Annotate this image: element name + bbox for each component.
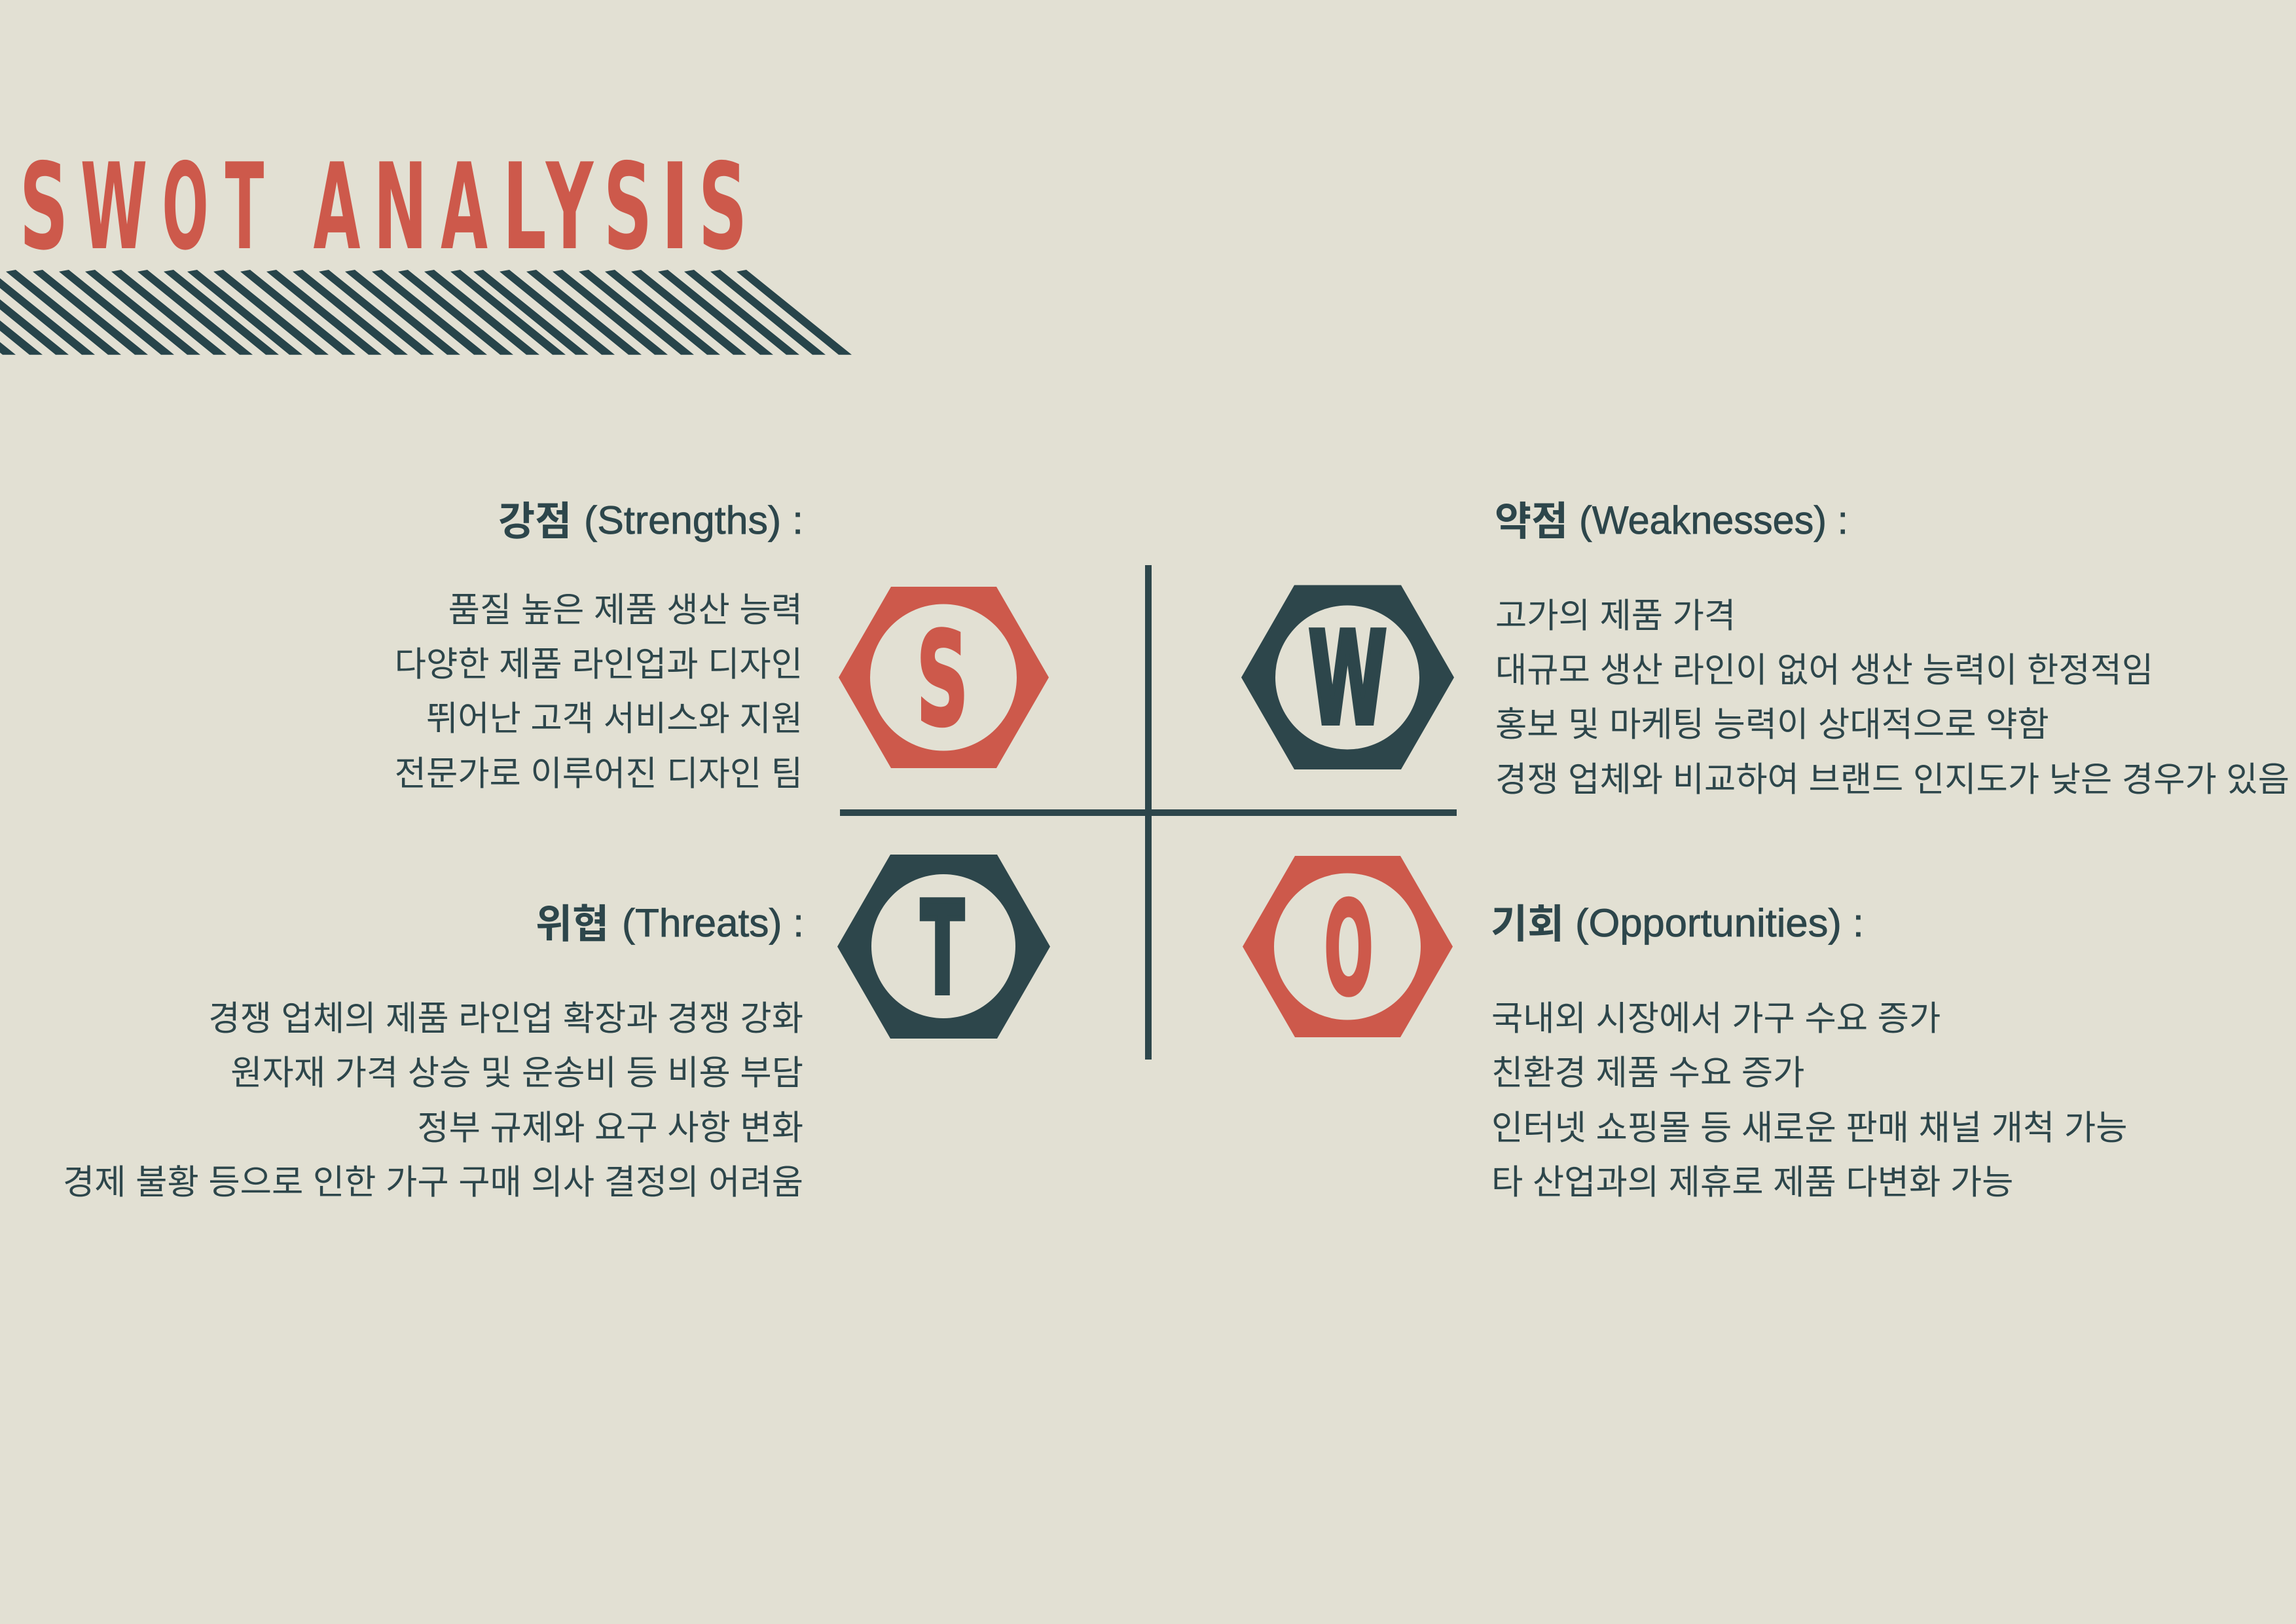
heading: strengths: (Strengths) : xyxy=(584,498,803,542)
list: strengths: 전문가로 이루어진 디자인 팀 xyxy=(395,754,803,793)
icon: W hexagon xyxy=(1241,585,1454,769)
list: threats: 경제 불황 등으로 인한 가구 구매 의사 결정의 어려움 xyxy=(63,1163,803,1202)
title: A xyxy=(441,138,488,277)
heading: threats: 위협 xyxy=(536,902,609,946)
list: weaknesses: 대규모 생산 라인이 없어 생산 능력이 한정적임 xyxy=(1495,651,2153,690)
title: Y xyxy=(545,138,594,276)
icon: S hexagon xyxy=(839,587,1049,768)
quadrant cross divider xyxy=(840,565,1457,1060)
heading: opportunities: (Opportunities) : xyxy=(1575,901,1864,945)
title: O xyxy=(162,139,209,277)
list: opportunities: 국내외 시장에서 가구 수요 증가 xyxy=(1491,999,1941,1038)
list: weaknesses xyxy=(1495,597,2289,799)
heading: strengths xyxy=(498,498,803,544)
list: strengths xyxy=(395,591,803,793)
list: opportunities xyxy=(1491,999,2128,1202)
heading: weaknesses: 약점 xyxy=(1495,499,1568,544)
title xyxy=(20,137,747,277)
icon: W hexagon: W xyxy=(1309,606,1387,752)
title: S xyxy=(20,138,68,276)
list: threats: 원자재 가격 상승 및 운송비 등 비용 부담 xyxy=(230,1054,803,1092)
striped banner under title xyxy=(0,270,852,355)
icon: O hexagon xyxy=(1243,856,1453,1037)
list: opportunities: 타 산업과의 제휴로 제품 다변화 가능 xyxy=(1491,1163,2013,1202)
list: threats xyxy=(63,999,803,1202)
panel: weaknesses xyxy=(1495,498,2289,799)
list: weaknesses: 경쟁 업체와 비교하여 브랜드 인지도가 낮은 경우가 있음 xyxy=(1495,760,2289,799)
heading: opportunities: 기회 xyxy=(1491,902,1564,946)
icon: T hexagon: T xyxy=(921,875,964,1022)
panel: threats xyxy=(63,901,804,1202)
list: strengths: 다양한 제품 라인업과 디자인 xyxy=(395,645,803,684)
title: N xyxy=(373,138,428,277)
icon: O hexagon: O xyxy=(1324,875,1374,1025)
panel: strengths xyxy=(395,498,803,793)
title: S xyxy=(604,138,652,276)
icon: T hexagon xyxy=(837,855,1050,1039)
title: L xyxy=(502,138,547,277)
list: threats: 경쟁 업체의 제품 라인업 확장과 경쟁 강화 xyxy=(208,999,803,1038)
panel: opportunities xyxy=(1491,901,2128,1202)
title: A xyxy=(314,138,361,277)
icon: S hexagon: S xyxy=(917,604,968,755)
list: weaknesses: 고가의 제품 가격 xyxy=(1495,597,1736,635)
title: T xyxy=(225,137,264,276)
list: opportunities: 인터넷 쇼핑몰 등 새로운 판매 채널 개척 가능 xyxy=(1491,1109,2128,1147)
title: I xyxy=(661,139,689,277)
heading: threats: (Threats) : xyxy=(622,901,804,945)
list: strengths: 뛰어난 고객 서비스와 지원 xyxy=(426,699,803,738)
heading: strengths: 강점 xyxy=(498,499,572,544)
title: W xyxy=(81,138,147,277)
heading: threats xyxy=(536,901,804,946)
title: S xyxy=(699,138,747,276)
list: opportunities: 친환경 제품 수요 증가 xyxy=(1491,1054,1804,1092)
list: threats: 정부 규제와 요구 사항 변화 xyxy=(417,1109,803,1147)
heading: weaknesses: (Weaknesses) : xyxy=(1579,498,1848,542)
list: weaknesses: 홍보 및 마케팅 능력이 상대적으로 약함 xyxy=(1495,705,2049,744)
list: strengths: 품질 높은 제품 생산 능력 xyxy=(448,591,803,629)
